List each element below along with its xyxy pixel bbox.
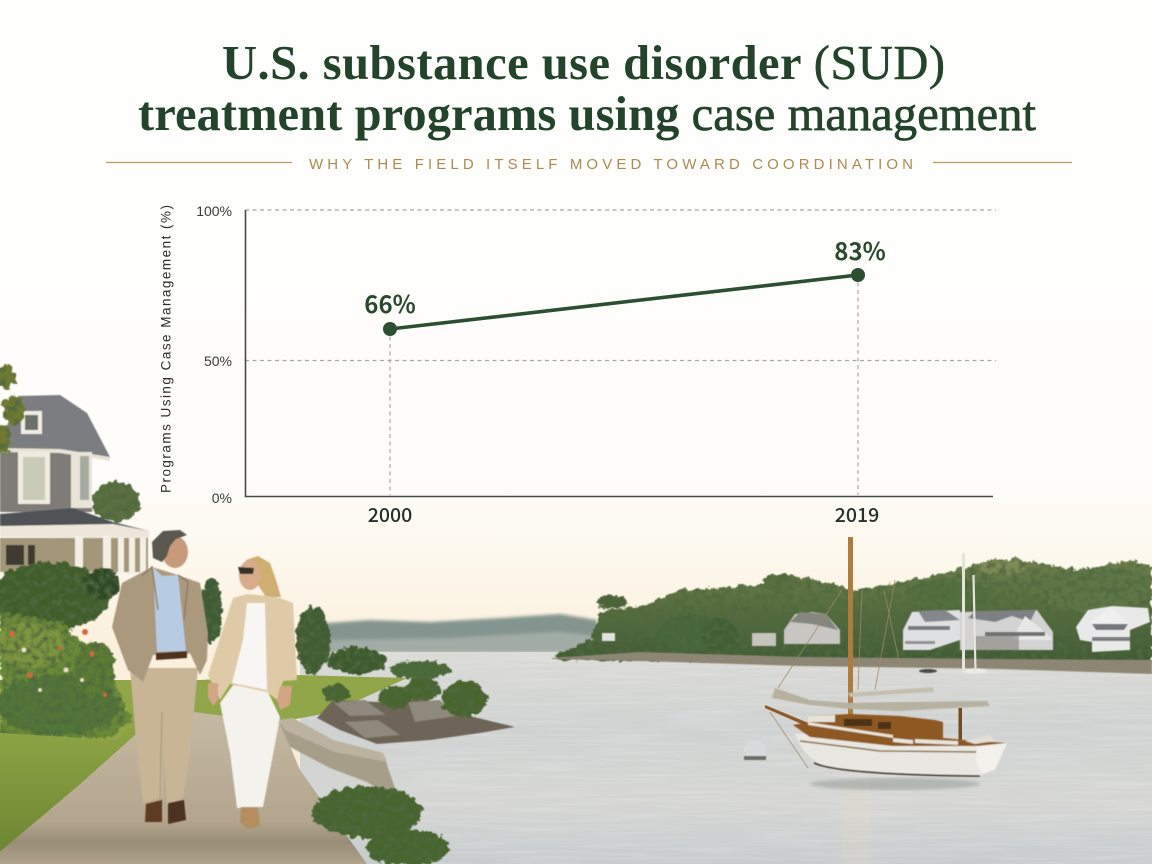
- trousers: [220, 685, 280, 808]
- rolled sails: [772, 687, 990, 711]
- x tick labels: 2019: [835, 499, 879, 528]
- background masts: [964, 553, 976, 672]
- lapels: [142, 567, 188, 620]
- lawn behind figures: [0, 675, 407, 760]
- value labels: [364, 232, 886, 320]
- bowsprit: [765, 705, 806, 726]
- shirt: [153, 567, 186, 652]
- head: [162, 536, 188, 568]
- photo scene: coastal walk: [0, 364, 1152, 864]
- stone sea wall: [278, 718, 398, 800]
- shoes: [145, 800, 162, 822]
- axes: [246, 210, 993, 496]
- woman walking: [208, 556, 297, 829]
- data line: [383, 268, 865, 336]
- water: [300, 652, 1152, 864]
- title: treatment programs using case management: [138, 88, 1037, 141]
- line chart: [158, 203, 996, 528]
- walking path: [0, 712, 367, 864]
- value labels: 66%: [364, 285, 416, 320]
- face: [239, 560, 261, 590]
- hair: [246, 556, 281, 597]
- shoes: [240, 807, 260, 829]
- hands: [208, 683, 292, 710]
- trousers: [130, 668, 198, 805]
- mooring buoy: [744, 740, 766, 760]
- belt: [156, 651, 187, 660]
- tee: [232, 603, 267, 690]
- y-axis title: Programs Using Case Management (%): [158, 205, 174, 493]
- house: [0, 395, 149, 574]
- y tick labels: 100%: [196, 203, 232, 219]
- rocks and island bushes: [317, 677, 515, 744]
- sunglasses: [238, 567, 254, 574]
- jacket: [112, 567, 208, 682]
- title: [138, 37, 1037, 141]
- x tick labels: 2000: [368, 499, 412, 528]
- jacket: [208, 594, 297, 700]
- aft post: [958, 708, 962, 740]
- x tick labels: [368, 499, 879, 528]
- y tick labels: [196, 203, 232, 506]
- man walking: [112, 530, 208, 824]
- hull: [793, 714, 1007, 776]
- subtitle with rules: WHY THE FIELD ITSELF MOVED TOWARD COORDINATION: [309, 156, 913, 173]
- sailboat: [744, 537, 1007, 790]
- value labels: 83%: [834, 232, 886, 267]
- waterfront houses: [602, 606, 1150, 674]
- left lawn: [0, 722, 150, 852]
- far island trees: [555, 558, 1152, 664]
- y tick labels: 0%: [212, 490, 232, 506]
- title: U.S. substance use disorder (SUD): [222, 37, 945, 90]
- distant shoreline: [315, 614, 597, 653]
- overhanging tree: [0, 364, 24, 455]
- mast: [848, 537, 853, 716]
- shoreline bush: [312, 786, 450, 864]
- flowering shrubs: [0, 562, 132, 738]
- background trees by lawn: [92, 482, 450, 679]
- y tick labels: 50%: [204, 353, 232, 369]
- rocky far shore strip: [552, 652, 1152, 674]
